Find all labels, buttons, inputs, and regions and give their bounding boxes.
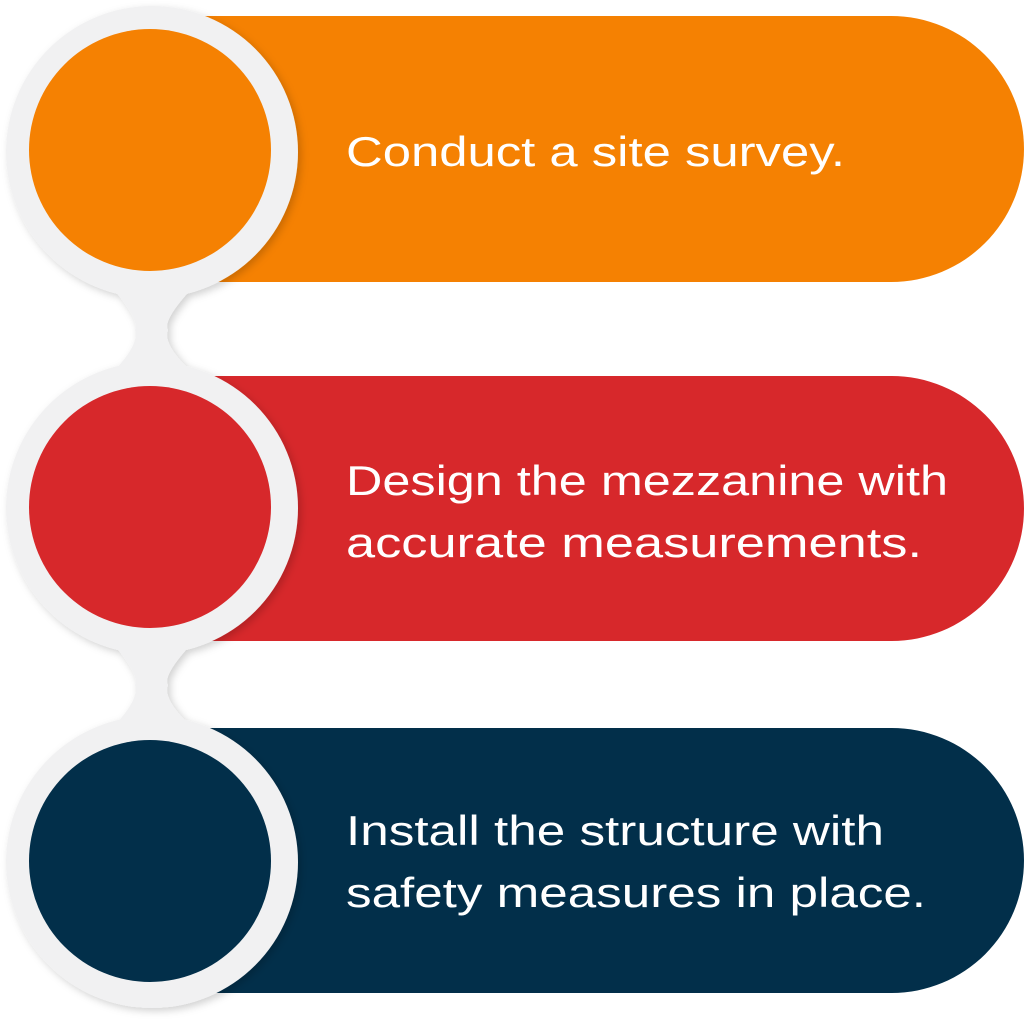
panel: red band xyxy=(200,376,1024,641)
text: step 2: Design the mezzanine with xyxy=(346,457,948,504)
text: step 1: Conduct a site survey. xyxy=(346,128,845,175)
circle: red xyxy=(29,386,271,628)
ring chain xyxy=(6,6,298,1008)
panel: red band: accurate measurements. xyxy=(346,519,922,566)
panel: orange band xyxy=(200,16,1024,282)
panel: navy band xyxy=(200,728,1024,993)
circle: navy xyxy=(29,740,271,982)
circle: orange xyxy=(29,29,271,271)
text: step 3: Install the structure with xyxy=(346,807,884,854)
panel: navy band: safety measures in place. xyxy=(346,869,926,916)
